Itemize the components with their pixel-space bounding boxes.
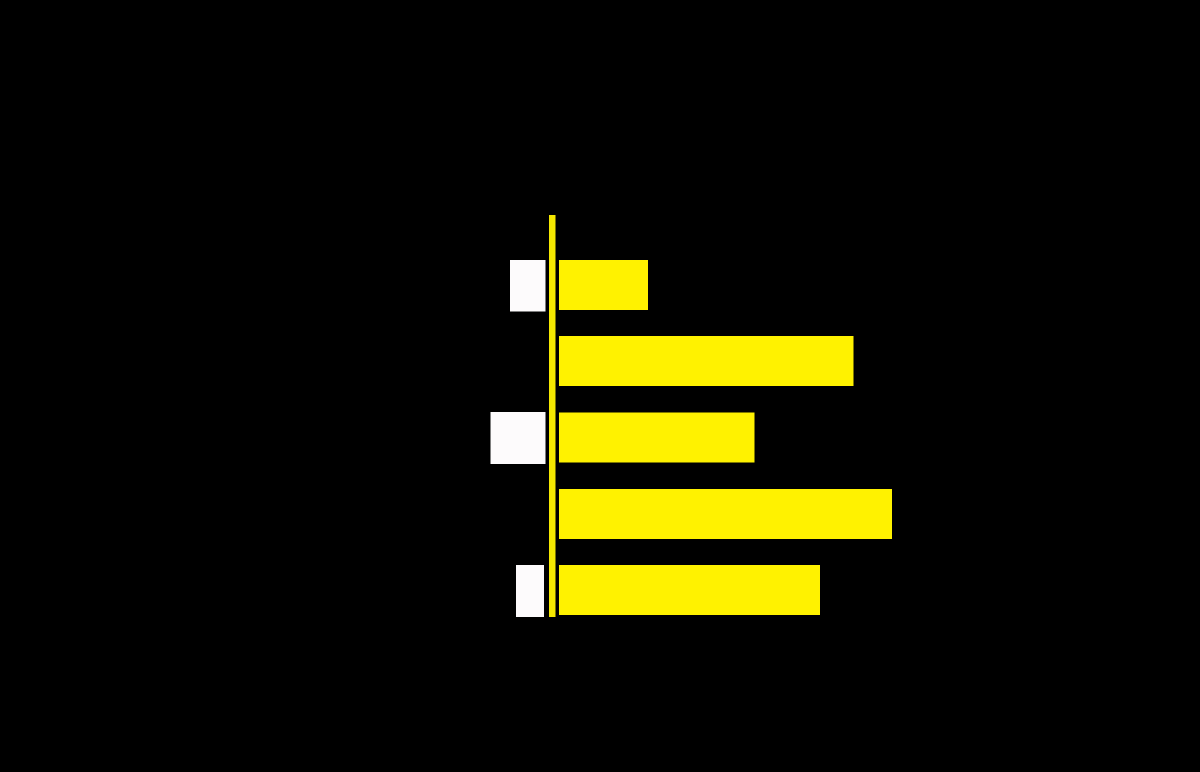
yellow bar: row 3 — [559, 412, 754, 462]
yellow bar: row 2 — [559, 336, 854, 386]
white bar: row 3 — [490, 412, 546, 464]
yellow bar: row 5 — [559, 565, 820, 615]
white bar: row 5 — [516, 565, 544, 617]
yellow bar: row 1 — [559, 260, 648, 310]
yellow bar: row 4 — [559, 489, 892, 539]
vertical axis line — [549, 215, 556, 617]
white bar: row 1 — [510, 260, 546, 312]
